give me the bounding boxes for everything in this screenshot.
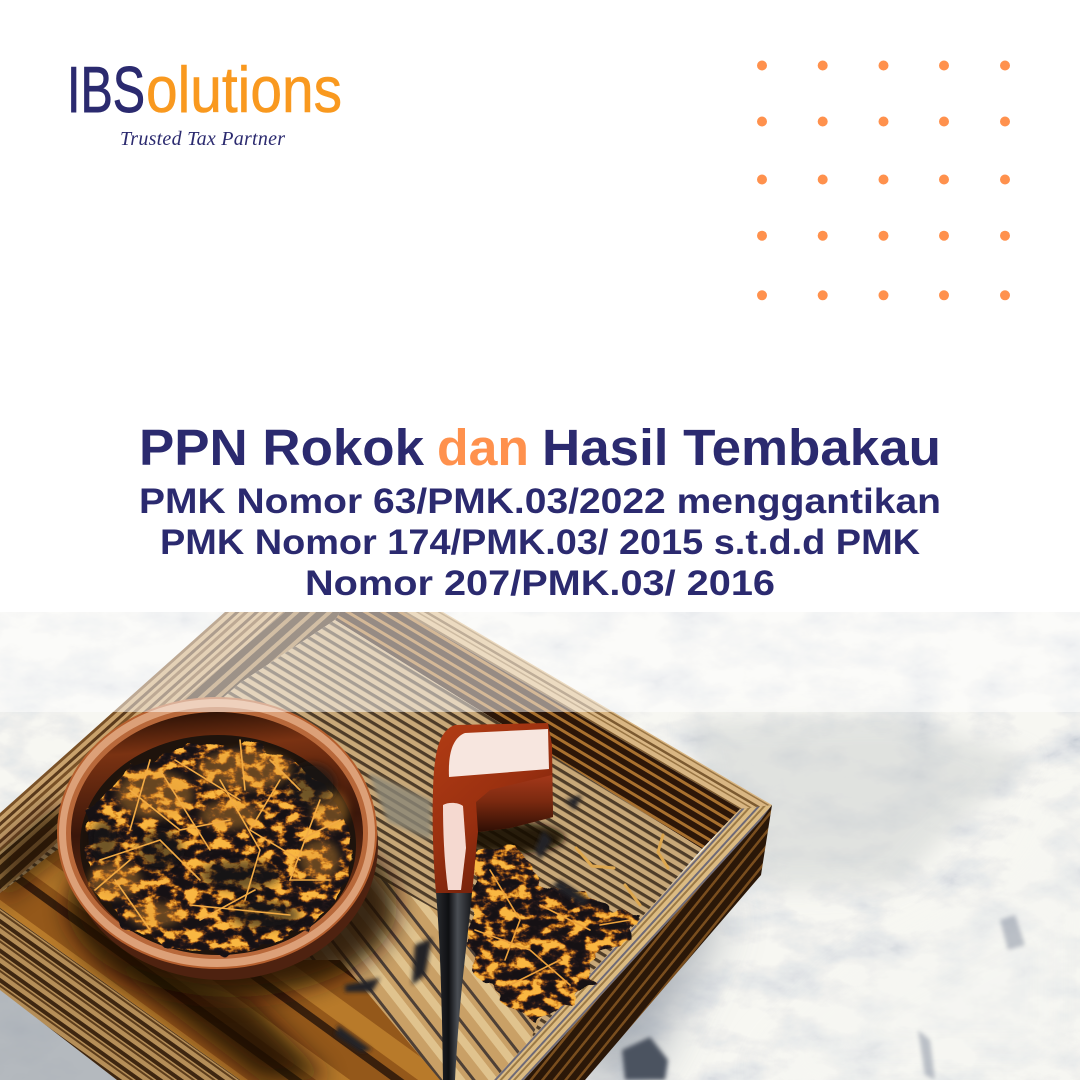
logo xyxy=(67,53,342,150)
decorative dot grid xyxy=(757,60,1010,300)
tray floor burnt plank left xyxy=(0,840,440,1080)
subtitle line 2: PMK Nomor 174/PMK.03/ 2015 s.t.d.d PMK xyxy=(160,523,920,562)
tray floor xyxy=(0,620,702,1080)
yellow leaf pieces xyxy=(576,835,668,905)
bowl dark interior xyxy=(80,735,356,955)
pile of tobacco xyxy=(468,845,640,1022)
bright tobacco clusters xyxy=(89,750,348,927)
tray floor planks right xyxy=(310,876,542,1080)
pipe stem xyxy=(436,892,472,1080)
pipe cream top xyxy=(449,729,549,777)
tray outer shadow side xyxy=(500,805,772,1080)
loose tobacco pile xyxy=(335,795,668,1052)
dark tobacco clumps xyxy=(91,763,336,929)
subtitle line 1: PMK Nomor 63/PMK.03/2022 menggantikan xyxy=(139,482,941,521)
logo wordmark: IBS xyxy=(67,53,145,126)
bowl rim xyxy=(58,698,376,968)
subtitle line 3: Nomor 207/PMK.03/ 2016 xyxy=(305,564,775,603)
pipe bowl lower grain xyxy=(476,775,553,832)
title words end: Hasil Tembakau xyxy=(542,419,941,476)
tray top-right rim xyxy=(403,612,772,809)
title xyxy=(139,419,941,476)
pipe side shadow xyxy=(455,822,565,854)
tobacco in bowl xyxy=(85,743,351,953)
subtitle xyxy=(139,482,941,603)
title accent word: dan xyxy=(437,419,529,476)
photo: tobacco pipe and bowl in wooden tray xyxy=(0,612,1080,1080)
tray top-right inner wall xyxy=(335,612,740,849)
tray bottom-left rim xyxy=(0,908,240,1080)
concrete background xyxy=(0,612,1080,1080)
wooden tray xyxy=(0,612,772,1080)
bowl inner rim line xyxy=(66,707,368,959)
lightened band overlay xyxy=(0,612,1080,712)
logo wordmark orange part: olutions xyxy=(146,53,342,126)
pipe xyxy=(433,723,553,1080)
pipe highlight xyxy=(443,803,466,890)
bowl body xyxy=(87,830,378,980)
logo tagline: Trusted Tax Partner xyxy=(120,128,285,150)
grey weathered plank xyxy=(368,772,431,840)
bowl inner wall xyxy=(71,712,363,954)
title words: PPN Rokok xyxy=(139,419,425,476)
tray right rim xyxy=(494,805,772,1080)
scattered leaves xyxy=(335,795,590,1052)
pipe wooden body xyxy=(433,723,553,893)
tobacco strands xyxy=(95,740,340,930)
pile strands xyxy=(475,870,630,985)
left wall shadow xyxy=(0,800,70,905)
tobacco bowl xyxy=(58,698,378,980)
tray left rim xyxy=(0,612,285,855)
burnt floor shadows xyxy=(90,950,330,1080)
bowl shadow xyxy=(67,813,397,997)
tray left inner wall xyxy=(0,612,340,893)
